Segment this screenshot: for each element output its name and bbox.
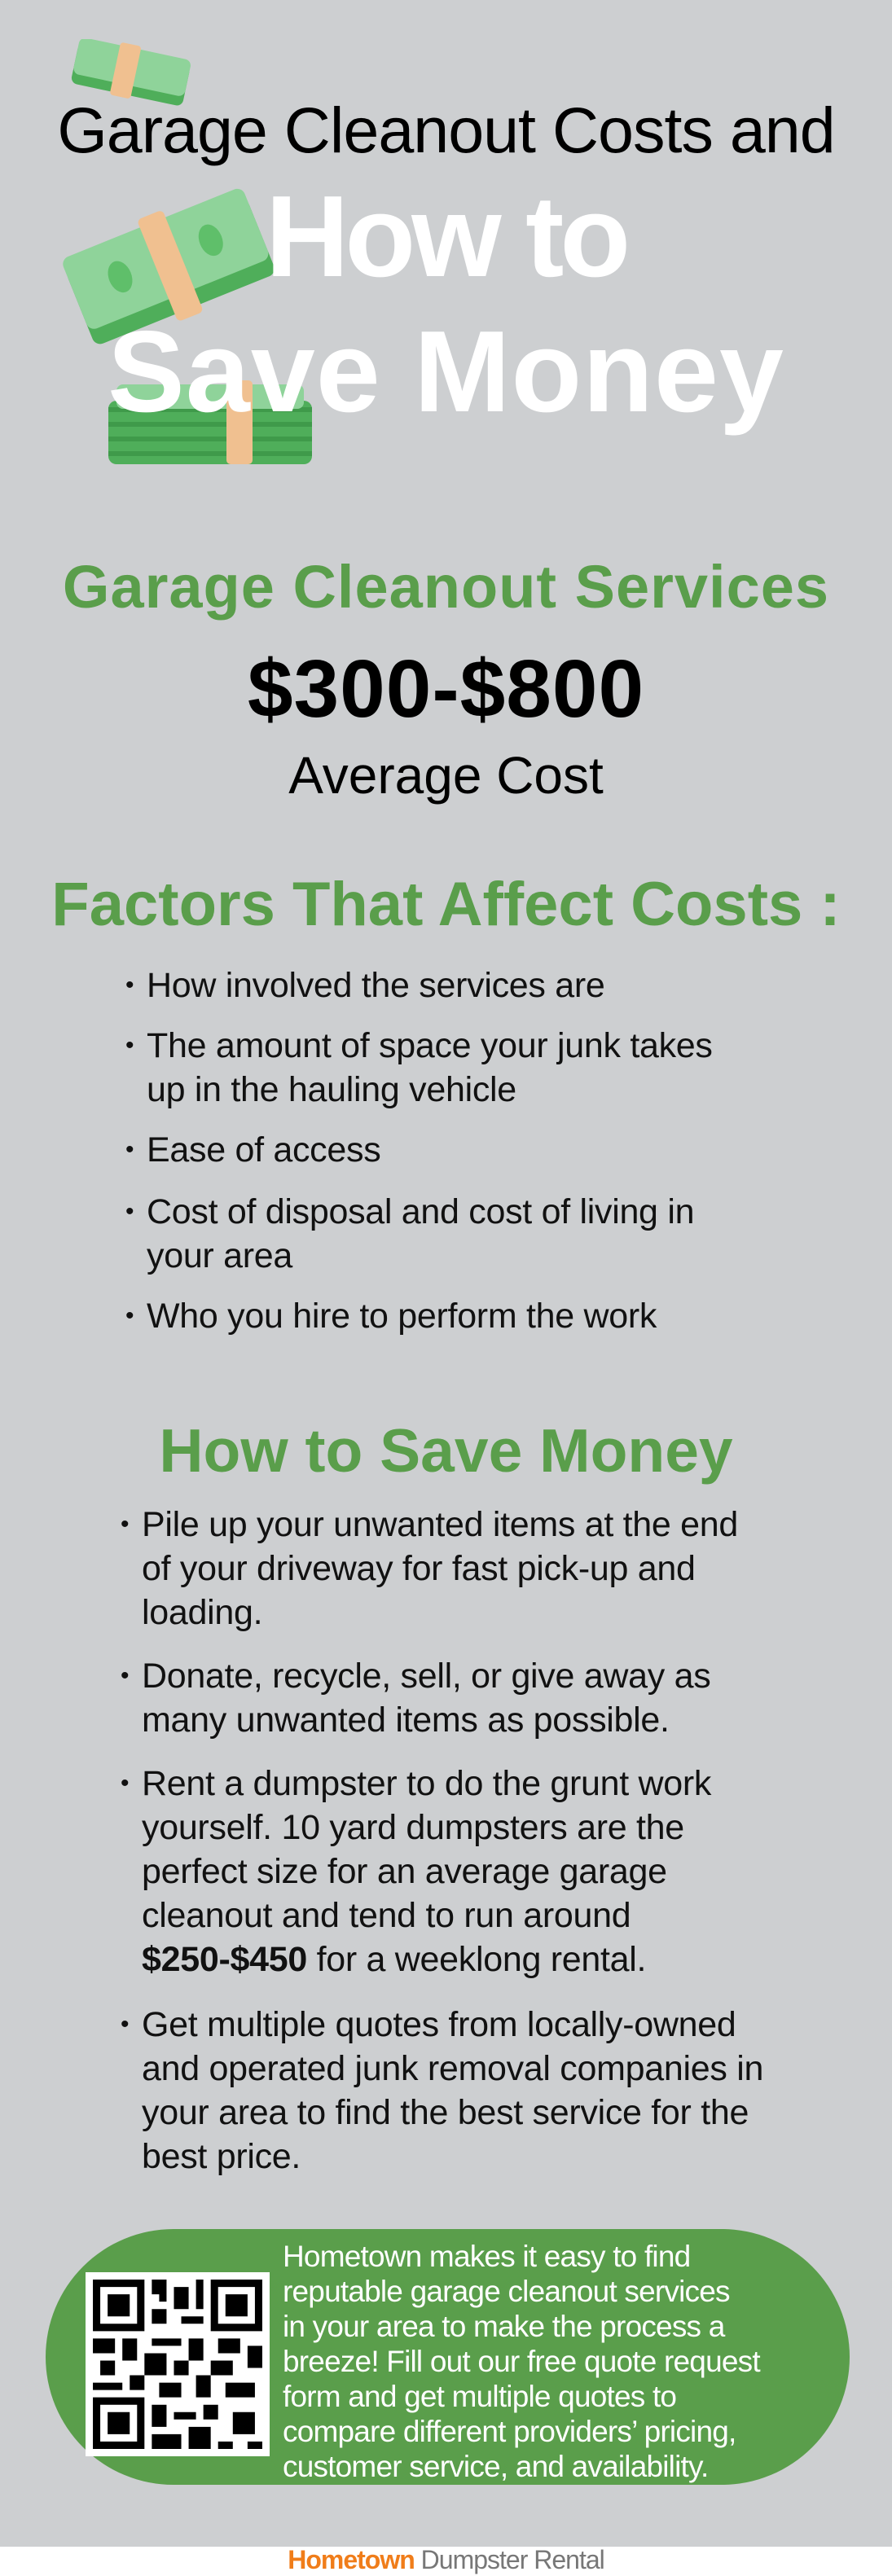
callout text: reputable garage cleanout services — [283, 2275, 730, 2308]
list: saving tips: perfect size for an average garage — [142, 1852, 667, 1891]
list: factors: Cost of disposal and cost of living in — [147, 1192, 694, 1231]
heading: How to Save Money: How to Save Money — [159, 1416, 733, 1485]
title: How to Save Money — [108, 172, 784, 437]
list: saving tips: of your driveway for fast pick-up and — [142, 1549, 696, 1588]
heading: Garage Cleanout Services: Garage Cleanout Services — [63, 553, 829, 621]
icon: money stack top — [72, 39, 191, 106]
list: saving tips: Donate, recycle, sell, or give away as — [142, 1657, 710, 1696]
footer logo: Hometown Dumpster Rental — [288, 2545, 604, 2574]
list: saving tips: Pile up your unwanted items at the end — [142, 1505, 738, 1544]
callout text — [283, 2240, 761, 2483]
title: How to Save Money: Save Money — [108, 307, 784, 437]
icon: money stack bottom — [108, 380, 312, 464]
heading: Factors That Affect Costs: Factors That Affect Costs : — [51, 870, 841, 939]
callout text: form and get multiple quotes to — [283, 2380, 676, 2413]
price: $300-$800 — [248, 643, 644, 735]
callout text: in your area to make the process a — [283, 2310, 725, 2343]
list: saving tips: yourself. 10 yard dumpsters are the — [142, 1808, 684, 1847]
list: saving tips: many unwanted items as possible. — [142, 1701, 670, 1740]
list: saving tips: and operated junk removal companies in — [142, 2049, 763, 2088]
list: saving tips: Rent a dumpster to do the grunt work — [142, 1764, 711, 1803]
list: saving tips: your area to find the best service for the — [142, 2093, 749, 2132]
label: Average Cost: Average Cost — [288, 746, 604, 805]
callout: green pill — [46, 2229, 850, 2485]
list: factors: up in the hauling vehicle — [147, 1070, 516, 1109]
list: saving tips — [121, 1505, 763, 2176]
callout text: Hometown makes it easy to find — [283, 2240, 690, 2273]
callout text: compare different providers’ pricing, — [283, 2415, 736, 2448]
list: saving tips: best price. — [142, 2137, 301, 2176]
title line 1: Garage Cleanout Costs and — [57, 94, 835, 166]
QR code — [86, 2272, 270, 2456]
list: factors: The amount of space your junk takes — [147, 1026, 713, 1065]
list: factors: your area — [147, 1236, 292, 1275]
list: saving tips: cleanout and tend to run around — [142, 1896, 631, 1935]
list: saving tips: $250-$450 for a weeklong rental. — [142, 1940, 646, 1979]
list: factors: How involved the services are — [147, 966, 604, 1005]
title: How to Save Money: How to — [266, 172, 626, 301]
list: factors: Who you hire to perform the work — [147, 1297, 657, 1336]
icon: money stack middle — [63, 189, 274, 344]
callout text: breeze! Fill out our free quote request — [283, 2345, 760, 2378]
list: saving tips: Get multiple quotes from locally-owned — [142, 2005, 736, 2044]
list: factors: Ease of access — [147, 1130, 380, 1170]
list: saving tips: loading. — [142, 1593, 262, 1632]
callout text: customer service, and availability. — [283, 2450, 708, 2483]
list: factors — [126, 966, 713, 1336]
